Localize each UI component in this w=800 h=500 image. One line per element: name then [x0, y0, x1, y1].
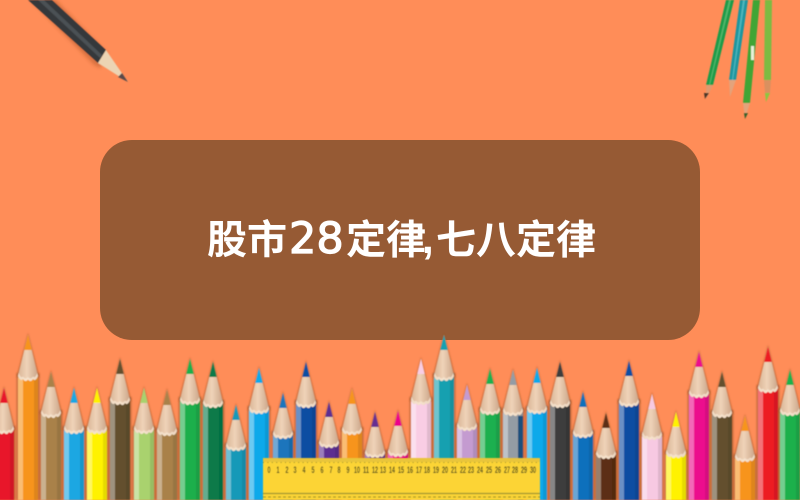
pencil: lilac	[456, 383, 478, 500]
pencil: red	[756, 345, 780, 500]
ruler numbers: 15	[398, 465, 404, 475]
ruler numbers: 23	[468, 465, 474, 475]
ruler numbers: 12	[372, 465, 378, 475]
pencil: tan	[40, 370, 62, 500]
ruler numbers: 0	[268, 465, 270, 475]
pencil: black top-left	[28, 0, 128, 82]
ruler numbers: 26	[495, 465, 501, 475]
pencil: chocolate	[594, 411, 618, 500]
pencil: navy	[294, 360, 318, 500]
pencil: lime	[764, 0, 772, 102]
pencil: magenta	[688, 350, 710, 500]
pencil: grey	[502, 368, 524, 500]
pencil: green	[478, 367, 502, 500]
ruler numbers: 18	[424, 465, 430, 475]
pencil: pale pink	[410, 357, 432, 500]
pencil: dark green marked	[743, 0, 760, 119]
ruler numbers: 9	[346, 465, 350, 475]
pencil: orange	[16, 333, 40, 500]
ruler numbers: 8	[338, 465, 340, 475]
ruler numbers: 17	[416, 465, 422, 475]
pencil: violet	[364, 410, 386, 500]
pencil: pale pink	[640, 392, 664, 500]
pencil: brown	[710, 370, 734, 500]
ruler numbers: 19	[433, 465, 439, 475]
pencil: teal	[432, 333, 456, 500]
title: 股市	[207, 218, 287, 262]
panel: title card	[100, 140, 700, 340]
pencil: teal	[729, 0, 748, 97]
ruler numbers: 24	[477, 465, 483, 475]
ruler numbers: 14	[389, 465, 395, 475]
pencil: yellow	[664, 410, 688, 500]
title	[207, 214, 596, 264]
ruler	[263, 458, 540, 500]
pencil: light green	[132, 386, 156, 500]
ruler numbers: 22	[460, 465, 466, 475]
pencil: red	[0, 386, 16, 500]
pencil row	[0, 333, 800, 500]
ruler numbers: 25	[486, 465, 492, 475]
ruler numbers: 30	[530, 465, 536, 475]
pencil: green	[778, 368, 800, 500]
ruler numbers: 16	[407, 465, 413, 475]
pencil: sky blue	[526, 366, 548, 500]
ruler numbers: 3	[294, 465, 296, 475]
pencil: teal	[224, 403, 248, 500]
ruler numbers: 4	[302, 465, 306, 475]
ruler numbers: 6	[320, 465, 324, 475]
ruler numbers: 13	[380, 465, 386, 475]
pencil: sky blue	[248, 366, 270, 500]
pencils: green set top-right	[704, 0, 772, 119]
pencil: orange	[734, 414, 756, 500]
title: ,	[422, 215, 434, 262]
pencil: orange	[340, 387, 364, 500]
ruler numbers: 20	[442, 465, 448, 475]
pencil: blue	[572, 390, 594, 500]
pencil: green	[704, 0, 734, 99]
pencil: navy	[618, 359, 640, 500]
pencil: yellow	[86, 386, 108, 500]
ruler numbers	[268, 465, 536, 475]
ruler numbers: 21	[451, 465, 457, 475]
pencil: tan	[156, 388, 178, 500]
pencil: dark brown	[108, 357, 132, 500]
pencil: magenta	[386, 409, 410, 500]
ruler numbers: 10	[354, 465, 360, 475]
pencil: dark green	[202, 360, 224, 500]
pencil: sky blue	[62, 386, 86, 500]
pencil: blue	[272, 391, 294, 500]
ruler numbers: 2	[286, 465, 288, 475]
ruler numbers: 11	[363, 465, 369, 475]
title: 28	[289, 214, 344, 264]
ruler numbers: 28	[512, 465, 518, 475]
title: 定律	[346, 218, 426, 262]
title: 七八定律	[436, 218, 596, 262]
ruler numbers: 5	[312, 465, 314, 475]
pencil: purple	[318, 400, 340, 500]
ruler numbers: 7	[330, 465, 332, 475]
ruler numbers: 1	[276, 465, 280, 475]
ruler numbers: 29	[521, 465, 527, 475]
pencil: black	[548, 360, 572, 500]
pencil: green	[178, 357, 202, 500]
ruler numbers: 27	[504, 465, 510, 475]
